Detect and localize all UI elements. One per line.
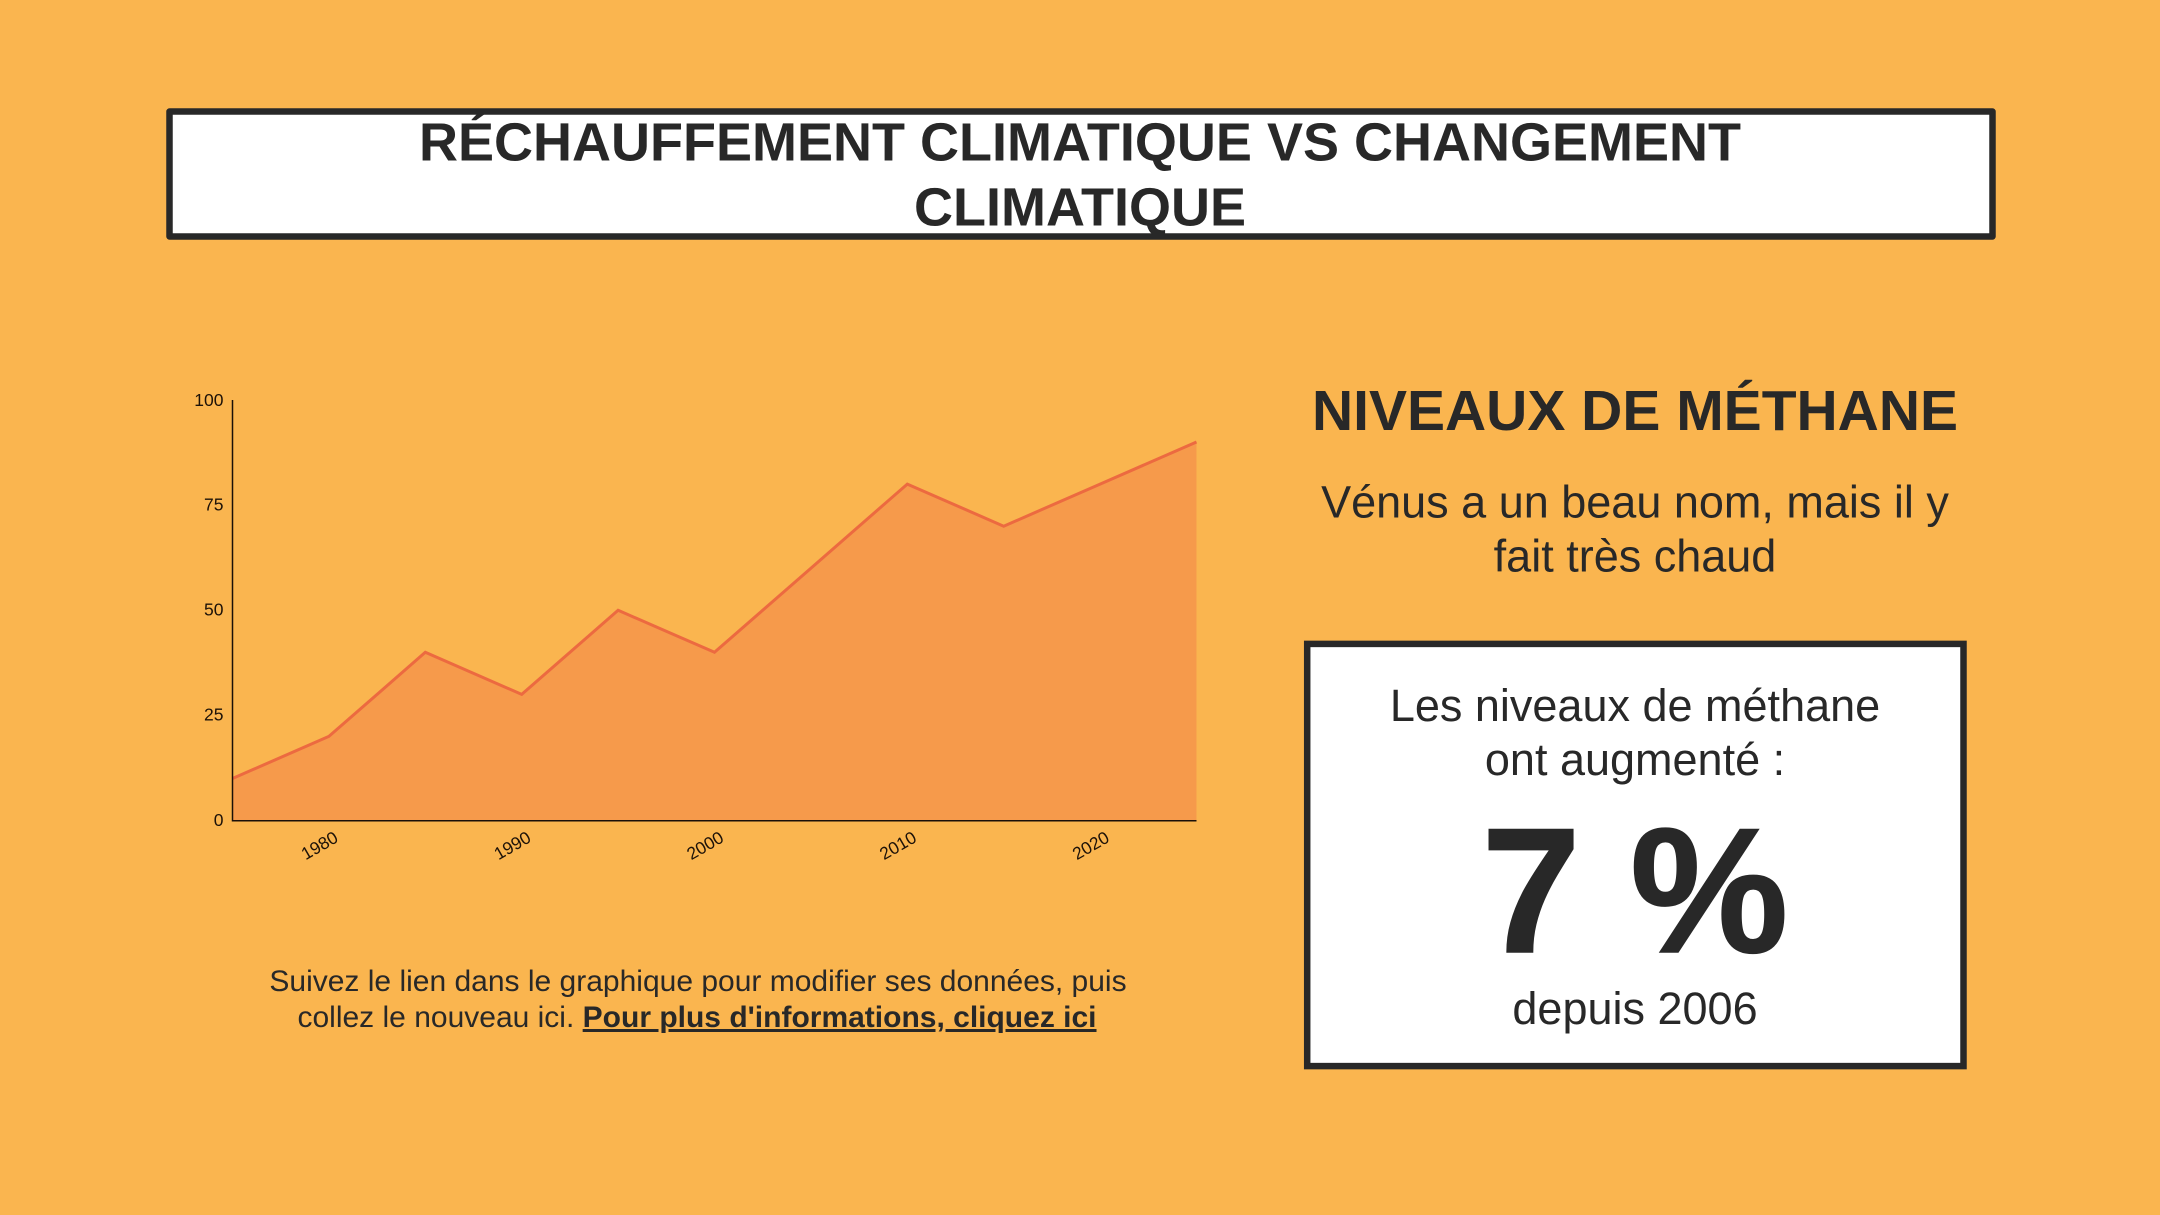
x axis labels <box>298 827 1113 864</box>
y axis labels: 0 <box>214 810 224 830</box>
callout intro text: ont augmenté : <box>1485 734 1785 785</box>
chart axes <box>232 400 1196 821</box>
y axis labels <box>194 390 224 830</box>
callout footer text: depuis 2006 <box>1512 983 1758 1034</box>
chart caption: Pour plus d'informations, cliquez ici <box>583 1001 1097 1034</box>
x axis labels: 1990 <box>490 827 534 864</box>
title text: CLIMATIQUE <box>914 178 1246 238</box>
area chart: methane levels <box>194 390 1196 864</box>
statistic callout box <box>1307 644 1964 1066</box>
chart caption: collez le nouveau ici. <box>297 1001 583 1034</box>
x axis labels: 2020 <box>1069 827 1113 864</box>
callout intro text: Les niveaux de méthane <box>1390 680 1880 731</box>
y axis labels: 100 <box>194 390 224 410</box>
y axis labels: 25 <box>204 704 224 724</box>
title text: RÉCHAUFFEMENT CLIMATIQUE VS CHANGEMENT <box>419 113 1741 173</box>
subheading text: Vénus a un beau nom, mais il y <box>1321 476 1949 528</box>
title banner <box>170 112 1992 238</box>
heading: methane levels: NIVEAUX DE MÉTHANE <box>1312 379 1958 443</box>
chart line <box>232 442 1196 778</box>
chart caption: Suivez le lien dans le graphique pour modifier ses données, puis <box>269 965 1127 998</box>
y axis labels: 75 <box>204 494 224 514</box>
big number: 7 % <box>1482 791 1788 990</box>
y axis labels: 50 <box>204 600 224 620</box>
x axis labels: 2010 <box>876 827 920 864</box>
subheading text: fait très chaud <box>1494 530 1776 582</box>
chart area fill <box>232 442 1196 820</box>
x axis labels: 2000 <box>683 827 727 864</box>
x axis labels: 1980 <box>298 827 342 864</box>
